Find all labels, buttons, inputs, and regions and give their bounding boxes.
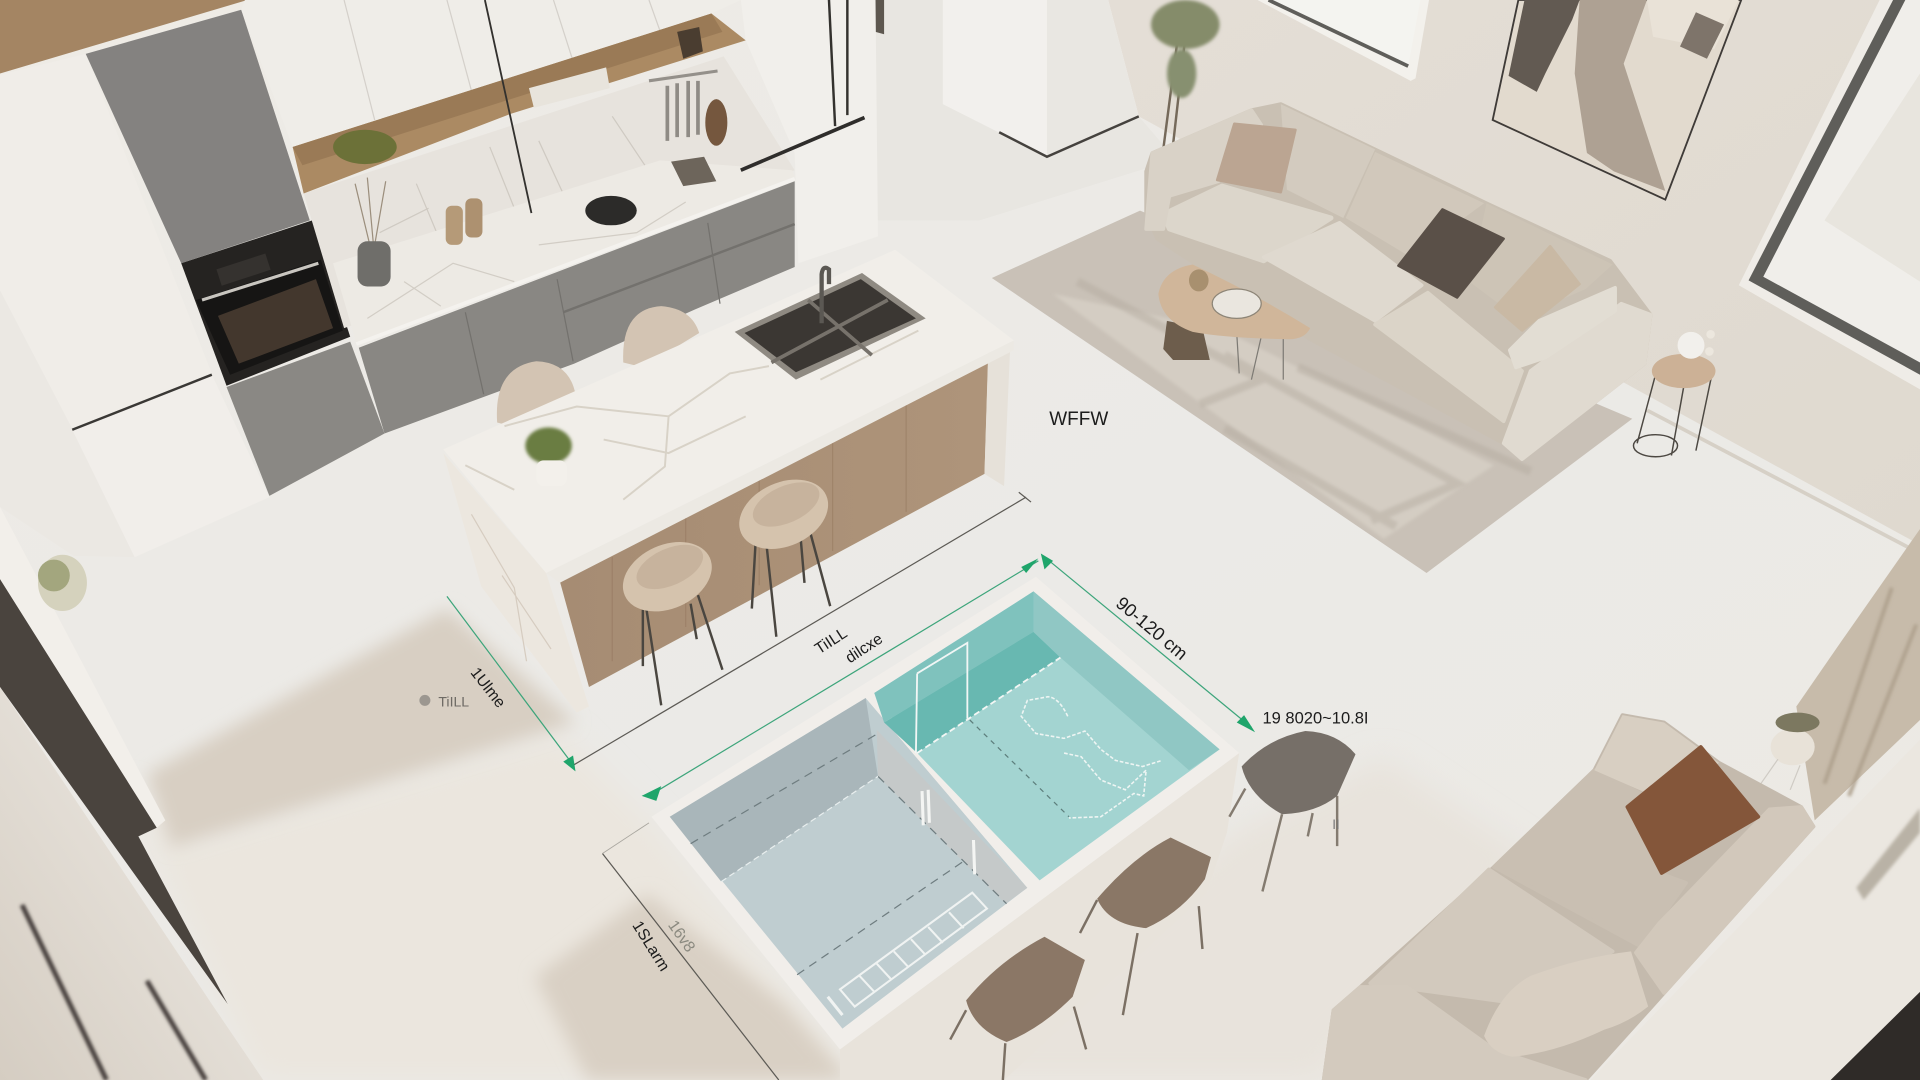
- white pillar: [943, 0, 1139, 157]
- gray zone: [670, 698, 1027, 1029]
- gray lower cabinet: [227, 342, 384, 496]
- wood shelf with items: [293, 13, 746, 193]
- label: TiILL left with dot: TiILL: [438, 694, 469, 710]
- lower right white wall: [1591, 740, 1920, 1080]
- curtains: [1796, 529, 1920, 820]
- island sink and faucet: [735, 268, 926, 380]
- marble counter: [333, 160, 795, 344]
- wood ceiling strip: [0, 0, 247, 73]
- left tall white cabinets: [0, 54, 269, 557]
- right window: [1739, 0, 1920, 389]
- floor plan island box: [651, 577, 1239, 1080]
- gray lower kitchen cabinets: [359, 181, 795, 433]
- lower right sofa: [1324, 715, 1813, 1080]
- label: 90-120 cm: 90-120 cm: [1112, 592, 1192, 664]
- potted plant by wall: [38, 555, 87, 611]
- label: dilcxe: dilcxe: [843, 630, 886, 667]
- label: 16v8: 16v8: [664, 918, 698, 956]
- rug: [992, 211, 1632, 573]
- wall artwork: [1493, 0, 1741, 200]
- sofa cushions: [1217, 124, 1615, 367]
- sofa: [1146, 104, 1651, 459]
- left wall cabinets: [0, 507, 263, 1080]
- door markers: [922, 790, 975, 874]
- label: right measurement: 19 8020~10.8I: [1262, 709, 1369, 728]
- dimension line: lower left: [602, 823, 779, 1080]
- sofa pillows: [1484, 747, 1758, 1057]
- top window: [1258, 0, 1429, 81]
- small plant on island: [525, 427, 572, 486]
- built-in oven: [181, 220, 350, 386]
- label: 1SLarm: 1SLarm: [628, 918, 672, 974]
- coffee table: [1158, 264, 1310, 380]
- back stools: [497, 306, 699, 429]
- side table with lamp: [1633, 330, 1716, 457]
- label: TiILL: TiILL: [812, 625, 851, 658]
- marble backsplash: [304, 56, 795, 328]
- counter items: [355, 157, 716, 287]
- dimension line: aisle: [642, 553, 1255, 801]
- label: II: II: [1332, 817, 1340, 832]
- label: WFFW: WFFW: [1049, 409, 1108, 430]
- white bench slats: [828, 893, 987, 1015]
- knife rack: [649, 71, 727, 146]
- right wall: [1108, 0, 1920, 553]
- upper white cabinets: [241, 0, 741, 147]
- tall potted plant: [1151, 0, 1220, 149]
- back corridor: [876, 0, 1176, 220]
- white outline fixture: [1021, 697, 1162, 818]
- label: TiILL left with dot: [419, 694, 469, 710]
- left wall beside cabinets: [0, 290, 135, 557]
- plant beside curtains: [1761, 713, 1820, 790]
- teal zone: [874, 591, 1220, 880]
- white divider: [866, 692, 1040, 888]
- kitchen island: [443, 250, 1014, 713]
- front bar stools: [612, 466, 839, 705]
- gray tall cabinet: [86, 10, 310, 263]
- label: 1Ulme: 1Ulme: [467, 665, 509, 711]
- dining chairs: [950, 731, 1356, 1080]
- dimension line: island length: [447, 492, 1031, 771]
- white column beside kitchen: [485, 0, 878, 263]
